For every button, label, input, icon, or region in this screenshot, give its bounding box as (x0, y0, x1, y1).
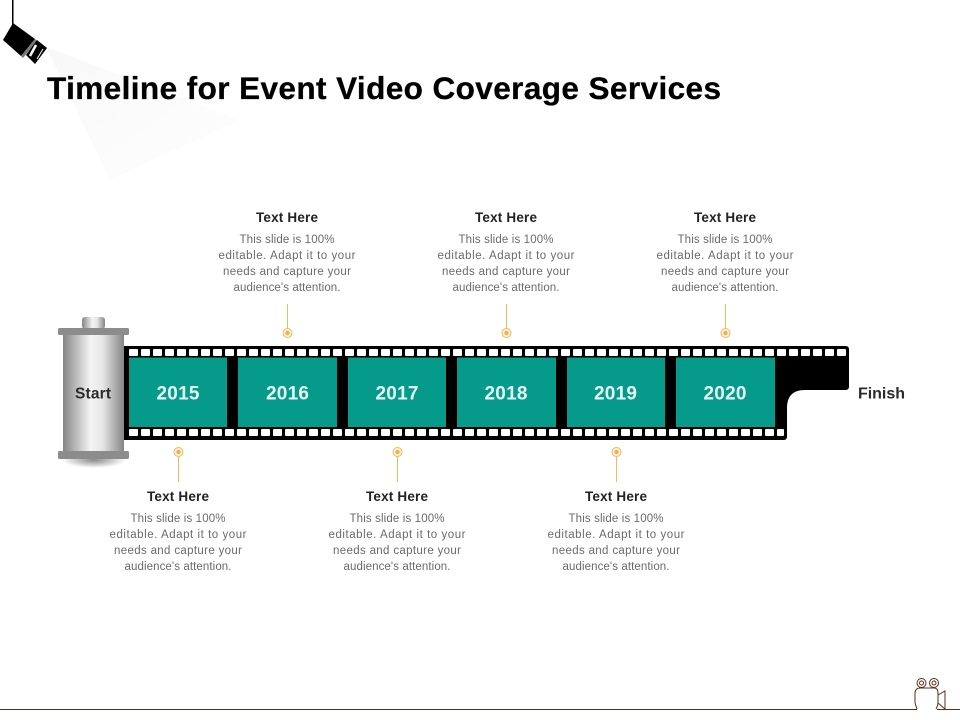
frame: 2016: 2016 (266, 384, 309, 404)
frame: 2020: 2020 (704, 384, 746, 404)
callout: 2019: This slide is 100% (568, 513, 664, 525)
callout: 2018: audience's attention. (452, 282, 560, 294)
callout: 2015: needs and capture your (114, 545, 242, 557)
callout: 2016 (218, 210, 356, 338)
callout: 2015: This slide is 100% (130, 513, 226, 525)
callout: 2015 (110, 448, 247, 573)
icon: spotlight (3, 0, 47, 64)
film strip timeline (124, 346, 849, 440)
frame: 2015: 2015 (156, 384, 200, 404)
callout: 2019 (548, 448, 685, 573)
callout: 2020: needs and capture your (661, 266, 789, 278)
frame: 2017 (348, 358, 446, 427)
frame: 2018: 2018 (484, 384, 528, 404)
callout: 2016: This slide is 100% (240, 234, 334, 246)
callout: 2020: Text Here (694, 210, 756, 225)
callout: 2020: audience's attention. (672, 282, 778, 294)
film strip body (124, 346, 849, 440)
start label: Start (75, 386, 111, 402)
callout: 2018: This slide is 100% (458, 234, 554, 246)
film canister (58, 317, 129, 468)
finish label: Finish (858, 386, 905, 402)
callout: 2019: needs and capture your (552, 545, 680, 557)
spotlight beam (46, 47, 240, 180)
callout: 2017: audience's attention. (344, 561, 450, 573)
callout: 2019: Text Here (585, 489, 647, 504)
footer rule (0, 708, 960, 710)
callout: 2016: editable. Adapt it to your (218, 250, 356, 262)
callout: 2017: editable. Adapt it to your (328, 529, 466, 541)
callout: 2017: needs and capture your (333, 545, 461, 557)
frame: 2019: 2019 (594, 384, 637, 404)
callout: 2018: needs and capture your (442, 266, 570, 278)
bottom sprocket holes (129, 429, 784, 436)
callout: 2018: Text Here (475, 210, 537, 225)
callout: 2019: audience's attention. (562, 561, 670, 573)
title: Timeline for Event Video Coverage Services (47, 70, 721, 106)
frame: 2018 (457, 358, 556, 427)
callout: 2016: audience's attention. (234, 282, 340, 294)
callout: 2015: editable. Adapt it to your (110, 529, 247, 541)
callout: 2017: Text Here (366, 489, 428, 504)
callout: 2018 (438, 210, 575, 338)
frame: 2019 (567, 358, 665, 427)
frame: 2016 (238, 358, 337, 427)
frame: 2020 (676, 358, 775, 427)
callout: 2017: This slide is 100% (350, 513, 444, 525)
callout: 2019: editable. Adapt it to your (548, 529, 685, 541)
icon: video camera (915, 678, 945, 709)
callout: 2020: editable. Adapt it to your (656, 250, 794, 262)
top sprocket holes (129, 349, 846, 356)
callout: 2015: Text Here (147, 489, 209, 504)
frame: 2017: 2017 (376, 384, 418, 404)
callout: 2016: Text Here (256, 210, 318, 225)
callout: 2020: This slide is 100% (678, 234, 772, 246)
callout: 2018: editable. Adapt it to your (438, 250, 575, 262)
callout: 2015: audience's attention. (124, 561, 232, 573)
callout: 2016: needs and capture your (223, 266, 351, 278)
callout: 2017 (328, 448, 466, 573)
frame: 2015 (129, 358, 227, 427)
callout: 2020 (656, 210, 794, 338)
